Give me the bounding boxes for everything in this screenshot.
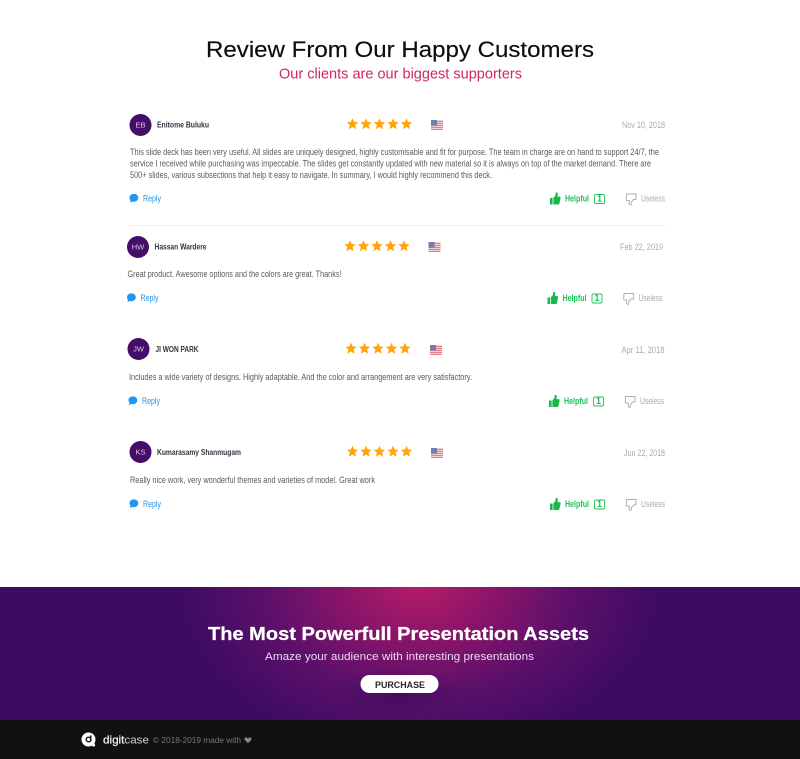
footer — [0, 720, 800, 759]
review text: 500+ slides, various subsections that help it easy to navigate. In summary, I would highly recommend this deck. — [130, 170, 492, 180]
subtitle: Our clients are our biggest supporters — [279, 66, 522, 82]
helpful action — [548, 292, 602, 304]
reviewer name: Kumarasamy Shanmugam — [157, 448, 241, 457]
review text: Great product. Awesome options and the colors are great. Thanks! — [128, 269, 342, 279]
icon: US flag — [431, 448, 443, 458]
icon: US flag — [430, 345, 442, 355]
avatar: EB: EB — [135, 121, 146, 130]
reviewer name: Hassan Wardere — [154, 242, 207, 252]
avatar: EB — [130, 114, 152, 136]
helpful action — [550, 498, 604, 510]
useless action: Useless — [641, 194, 665, 204]
reply action — [128, 396, 160, 406]
icon: heart — [244, 737, 252, 743]
purchase button: PURCHASE — [375, 680, 425, 691]
avatar: KS: KS — [135, 448, 146, 457]
purchase button — [360, 675, 438, 693]
review text: This slide deck has been very useful. All slides are uniquely designed, highly customisable and fit for purpose. The team in charge are on hand to support 24/7, the — [130, 147, 659, 157]
reply action — [127, 293, 159, 303]
reviewer name: JI WON PARK — [156, 345, 199, 354]
helpful action: Helpful — [564, 396, 588, 406]
review text: Really nice work, very wonderful themes and varieties of model. Great work — [130, 475, 375, 485]
star rating — [347, 446, 412, 457]
useless action — [626, 194, 665, 205]
review text — [130, 147, 659, 180]
helpful action: 1 — [597, 499, 602, 509]
title: Review From Our Happy Customers — [206, 37, 594, 62]
helpful action: 1 — [597, 194, 602, 204]
helpful action — [549, 395, 604, 407]
icon: US flag — [428, 242, 440, 252]
review date: Nov 10, 2018 — [622, 120, 665, 130]
star rating — [345, 343, 411, 354]
star rating — [347, 118, 412, 129]
avatar: HW — [127, 236, 149, 258]
useless action: Useless — [640, 396, 664, 406]
reply action — [130, 194, 161, 204]
helpful action: Helpful — [565, 194, 589, 204]
helpful action: Helpful — [562, 293, 586, 303]
reply action — [130, 499, 161, 509]
reply action: Reply — [142, 396, 160, 406]
useless action: Useless — [638, 293, 663, 303]
icon: US flag — [431, 120, 443, 130]
copyright text: © 2018-2019 made with — [153, 735, 241, 745]
review text: Includes a wide variety of designs. Highly adaptable. And the color and arrangement are very satisfactory. — [129, 372, 472, 382]
banner: purchase call to action — [0, 587, 800, 720]
helpful action — [550, 192, 604, 204]
banner subheading: Amaze your audience with interesting presentations — [265, 651, 535, 663]
banner heading: The Most Powerfull Presentation Assets — [208, 624, 589, 644]
review card: Hassan Wardere — [127, 236, 663, 304]
useless action — [624, 293, 663, 304]
reply action: Reply — [140, 293, 159, 303]
review date: Apr 11, 2018 — [622, 345, 664, 355]
review card: Enitome Buluku — [130, 114, 665, 205]
avatar: JW: JW — [133, 345, 145, 354]
review date: Jun 22, 2018 — [624, 448, 665, 458]
logo icon — [82, 732, 96, 747]
reply action: Reply — [143, 499, 161, 509]
review date: Feb 22, 2019 — [620, 242, 663, 252]
review card: JI WON PARK — [128, 338, 664, 407]
star rating — [344, 240, 410, 251]
useless action — [626, 499, 665, 510]
helpful action: 1 — [594, 293, 600, 303]
review text: service I received while purchasing was impeccable. The slides get constantly updated with new material so it is always on top of the market demand. There are — [130, 158, 651, 168]
avatar: KS — [130, 441, 152, 463]
helpful action: 1 — [596, 396, 601, 406]
avatar: HW: HW — [132, 243, 145, 252]
reply action: Reply — [143, 194, 161, 204]
useless action — [625, 396, 664, 407]
brand name: digitcase — [103, 734, 149, 746]
useless action: Useless — [641, 499, 665, 509]
helpful action: Helpful — [565, 499, 589, 509]
reviewer name: Enitome Buluku — [157, 120, 209, 130]
avatar: JW — [128, 338, 150, 360]
review card: Kumarasamy Shanmugam — [130, 441, 665, 510]
